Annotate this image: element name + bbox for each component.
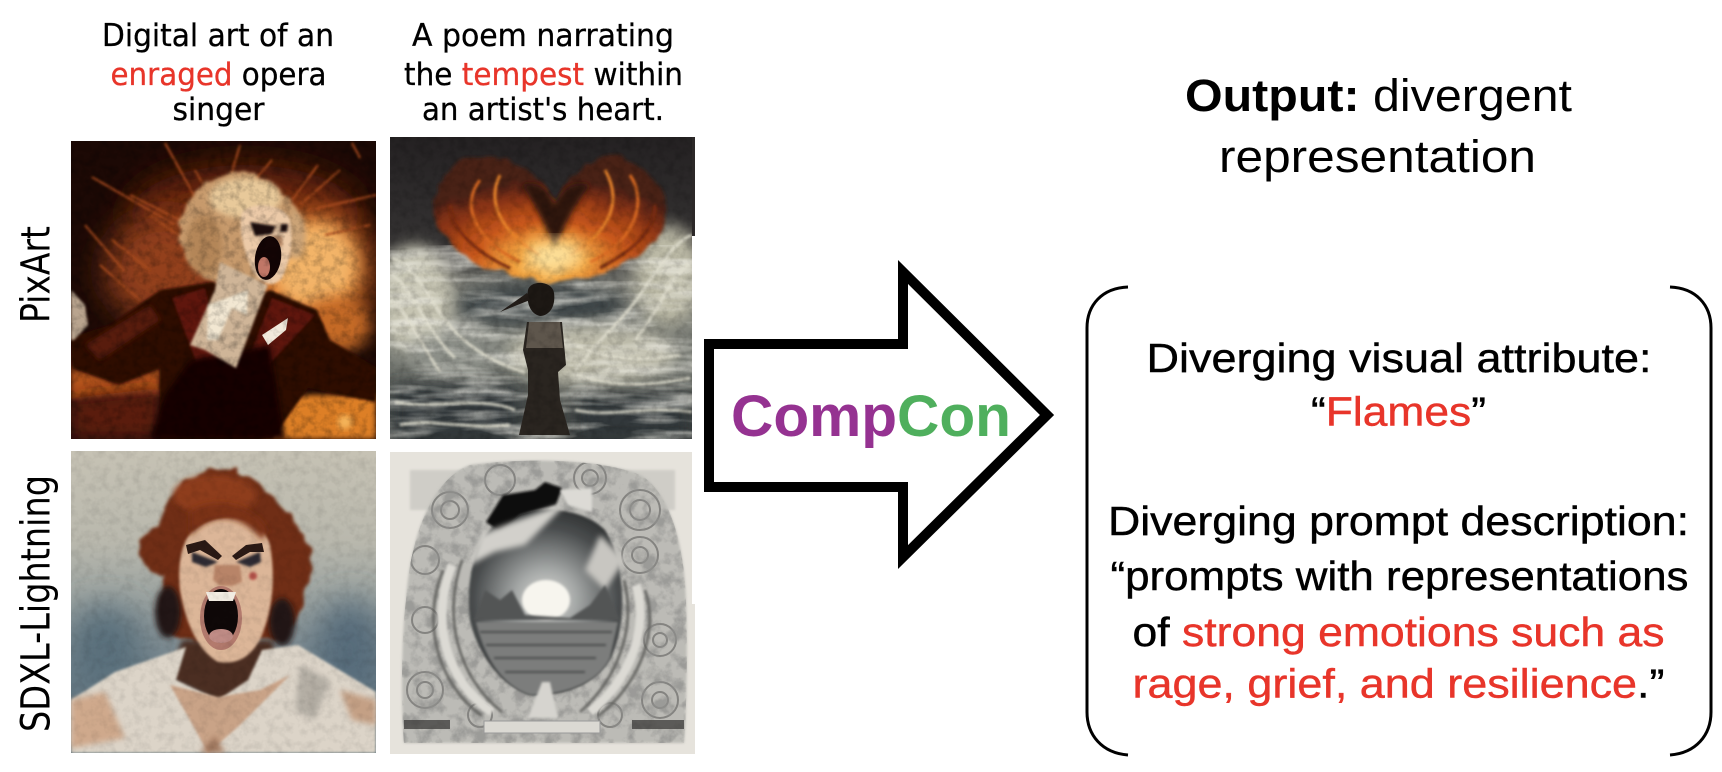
prompt caption: tempest poem (404, 18, 683, 128)
heart of fire (433, 157, 665, 282)
text block: diverging visual attribute (1146, 335, 1652, 434)
text block: diverging prompt description: rage, grief, and resilience .” (1132, 660, 1664, 706)
left hand (71, 290, 88, 340)
text block: diverging prompt description (1108, 498, 1689, 706)
curl strokes (407, 462, 678, 727)
moon (522, 580, 570, 620)
base plaque (404, 720, 450, 729)
neck and shirt (190, 262, 268, 368)
wave strokes (392, 235, 692, 426)
woman silhouette (500, 283, 570, 435)
row label: PixArt: PixArt (14, 226, 60, 323)
text block: diverging prompt description: “prompts with representations (1110, 553, 1688, 599)
vertical trunks (442, 565, 640, 712)
prompt caption: tempest poem: A poem narrating (412, 18, 674, 54)
breaking waves (455, 283, 625, 327)
text block: diverging visual attribute: “Flames ” (1311, 388, 1486, 434)
mouth (200, 586, 242, 650)
text block: diverging prompt description: of strong emotions such as (1132, 609, 1664, 655)
neck (175, 638, 278, 698)
prompt caption: enraged opera singer: enraged opera (110, 57, 326, 93)
dark sky patch (486, 482, 562, 532)
prompt caption: enraged opera singer (102, 18, 334, 128)
water (476, 622, 618, 695)
heading: output (1185, 70, 1573, 182)
fire lower right (262, 395, 376, 439)
heading: output: representation (1219, 131, 1536, 182)
text block: diverging visual attribute: Diverging visual attribute: (1146, 335, 1652, 381)
cloud overlap (470, 502, 568, 565)
chest (170, 675, 290, 753)
heading: output: Output: divergent (1185, 70, 1573, 121)
face (240, 205, 292, 284)
arrow with CompCon label: CompCon (731, 384, 1011, 449)
hair (179, 175, 301, 285)
arrow with CompCon label (709, 272, 1047, 557)
image edge sliver (692, 604, 695, 754)
prompt caption: enraged opera singer: singer (172, 92, 265, 128)
image: SDXL-Lightning enraged woman (67, 451, 385, 753)
right bracket (1670, 287, 1711, 755)
text block: diverging prompt description: Diverging prompt description: (1108, 498, 1689, 544)
prompt caption: tempest poem: the tempest within (404, 57, 683, 93)
faded text behind (410, 470, 675, 510)
row label: SDXL-Lightning: SDXL-Lightning (14, 475, 60, 732)
flame swirls (450, 170, 655, 268)
fire lower left (71, 345, 160, 400)
brows and eyes (186, 540, 264, 560)
cone centre (528, 682, 558, 718)
portal interior (469, 510, 622, 695)
image: PixArt enraged opera singer (71, 141, 398, 439)
grain (71, 141, 376, 439)
image: PixArt tempest in the heart (377, 137, 702, 439)
ornate ring (402, 461, 687, 743)
image: SDXL-Lightning ornate poem engraving (390, 452, 692, 754)
mountains (474, 585, 620, 620)
hair (140, 469, 312, 640)
prompt caption: enraged opera singer: Digital art of an (102, 18, 334, 54)
bow (207, 290, 248, 340)
shirt (71, 645, 376, 753)
prompt caption: tempest poem: an artist's heart. (422, 92, 664, 128)
jacket (71, 282, 376, 439)
image edge sliver (692, 137, 695, 236)
left bracket (1087, 287, 1128, 755)
face (179, 518, 273, 663)
